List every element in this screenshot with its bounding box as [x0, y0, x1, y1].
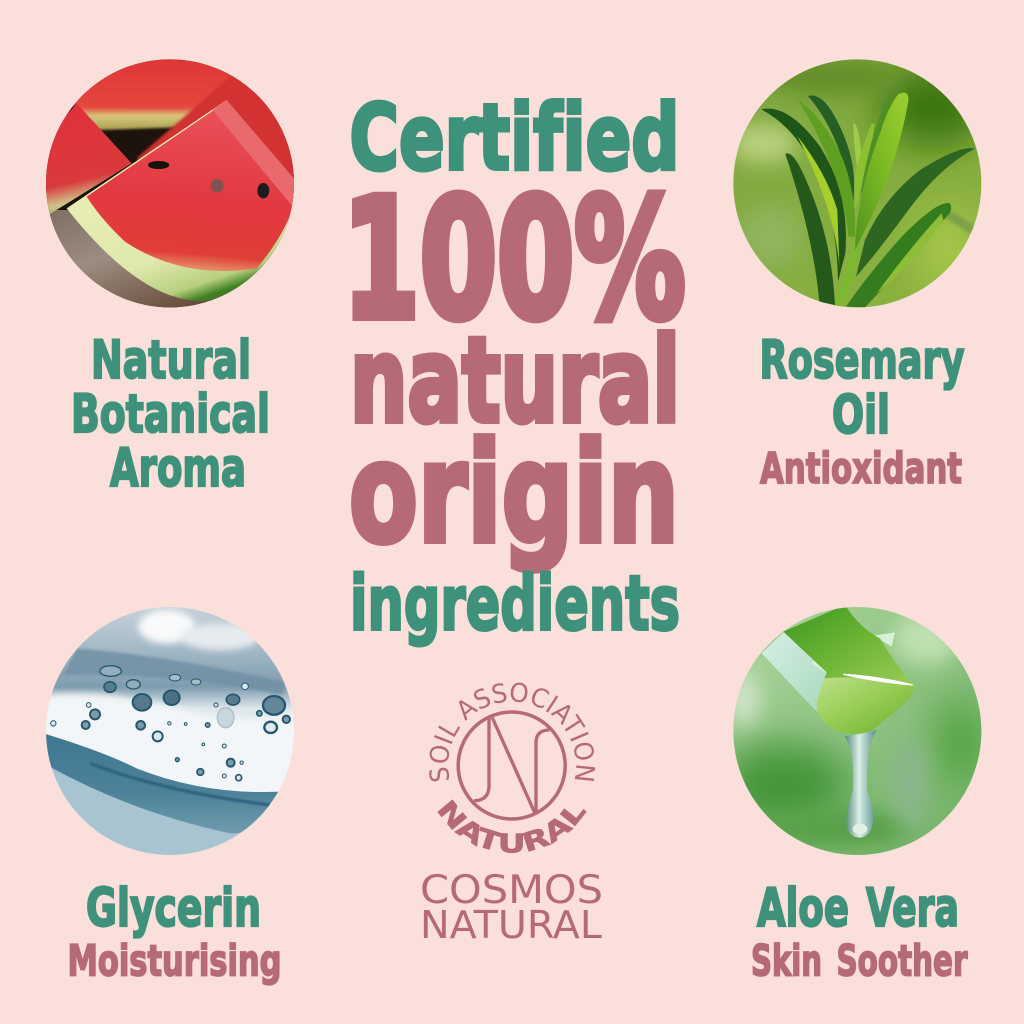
label: Natural Botanical Aroma: Aroma [110, 438, 246, 499]
seal ring [458, 712, 565, 819]
label: Glycerin Moisturising [68, 878, 282, 986]
label: Aloe Vera Skin Soother [751, 878, 968, 986]
photo part: left slice [37, 103, 132, 214]
label: Glycerin Moisturising: Glycerin [86, 878, 261, 939]
photo part: gel drip [845, 730, 877, 838]
photo: rosemary sprig [733, 59, 982, 308]
photo part: top reflections [46, 607, 294, 726]
photo part: top back slice [73, 59, 246, 132]
label: Aloe Vera Skin Soother: Skin [751, 936, 822, 986]
photo: glycerin gel with bubbles [46, 607, 294, 855]
photo part: upper pair of leaves [808, 95, 854, 210]
label: Aloe Vera Skin Soother: Soother [836, 936, 968, 986]
heading: Certified: Certified [350, 86, 680, 191]
seal arc text top: SOIL ASSOCIATION [429, 682, 596, 782]
seal arc text bottom: NATURAL [437, 800, 587, 854]
photo part: stem [833, 237, 862, 307]
photo part: wooden table [49, 210, 290, 308]
photo part: bright centre leaf [860, 91, 890, 197]
heading: origin: origin [349, 413, 679, 574]
photo part: right dark leaf [856, 148, 975, 277]
label: Aloe Vera Skin Soother: Vera [866, 878, 959, 939]
certification name: COSMOS NATURAL [420, 868, 603, 947]
label: Natural Botanical Aroma: Natural [91, 330, 251, 391]
photo part: left dark leaf [785, 153, 835, 305]
heading: ingredients: ingredients [350, 558, 680, 648]
label: Rosemary Oil Antioxidant [760, 330, 964, 494]
photo part: lower right leaf [846, 203, 951, 307]
photo part: flesh highlight [843, 674, 913, 685]
photo: watermelon slices [46, 59, 294, 308]
photo part: leaf body [783, 605, 916, 687]
photo part: blurred backdrop [717, 612, 983, 848]
certification name: COSMOS NATURAL: NATURAL [420, 903, 602, 947]
certification seal: Soil Association Natural [429, 682, 596, 854]
photo part: right back slice [136, 76, 294, 222]
heading: 100%: 100% [342, 164, 686, 356]
photo part: leaf skin [762, 631, 827, 712]
photo part: small centre leaves [853, 123, 862, 166]
photo part: blurred backdrop [730, 57, 990, 293]
label: Glycerin Moisturising: Moisturising [68, 936, 282, 986]
label: Aloe Vera Skin Soother: Aloe [757, 878, 849, 939]
photo part: bubbles [51, 666, 290, 781]
photo: aloe vera with drip [733, 607, 982, 855]
photo part: pale base [49, 759, 254, 855]
label: Natural Botanical Aroma [71, 330, 270, 499]
label: Rosemary Oil Antioxidant: Oil [832, 385, 890, 446]
heading: natural: natural [350, 312, 680, 449]
photo part: leaf spines [812, 632, 895, 673]
photo part: cut flesh [817, 677, 916, 734]
seal monogram N [474, 718, 549, 813]
certification name: COSMOS NATURAL: COSMOS [420, 868, 603, 913]
photo part: main wedge [67, 100, 297, 301]
photo part: long curved leaf [761, 109, 846, 282]
photo part: lower gel band [43, 733, 280, 833]
label: Natural Botanical Aroma: Botanical [71, 384, 270, 445]
